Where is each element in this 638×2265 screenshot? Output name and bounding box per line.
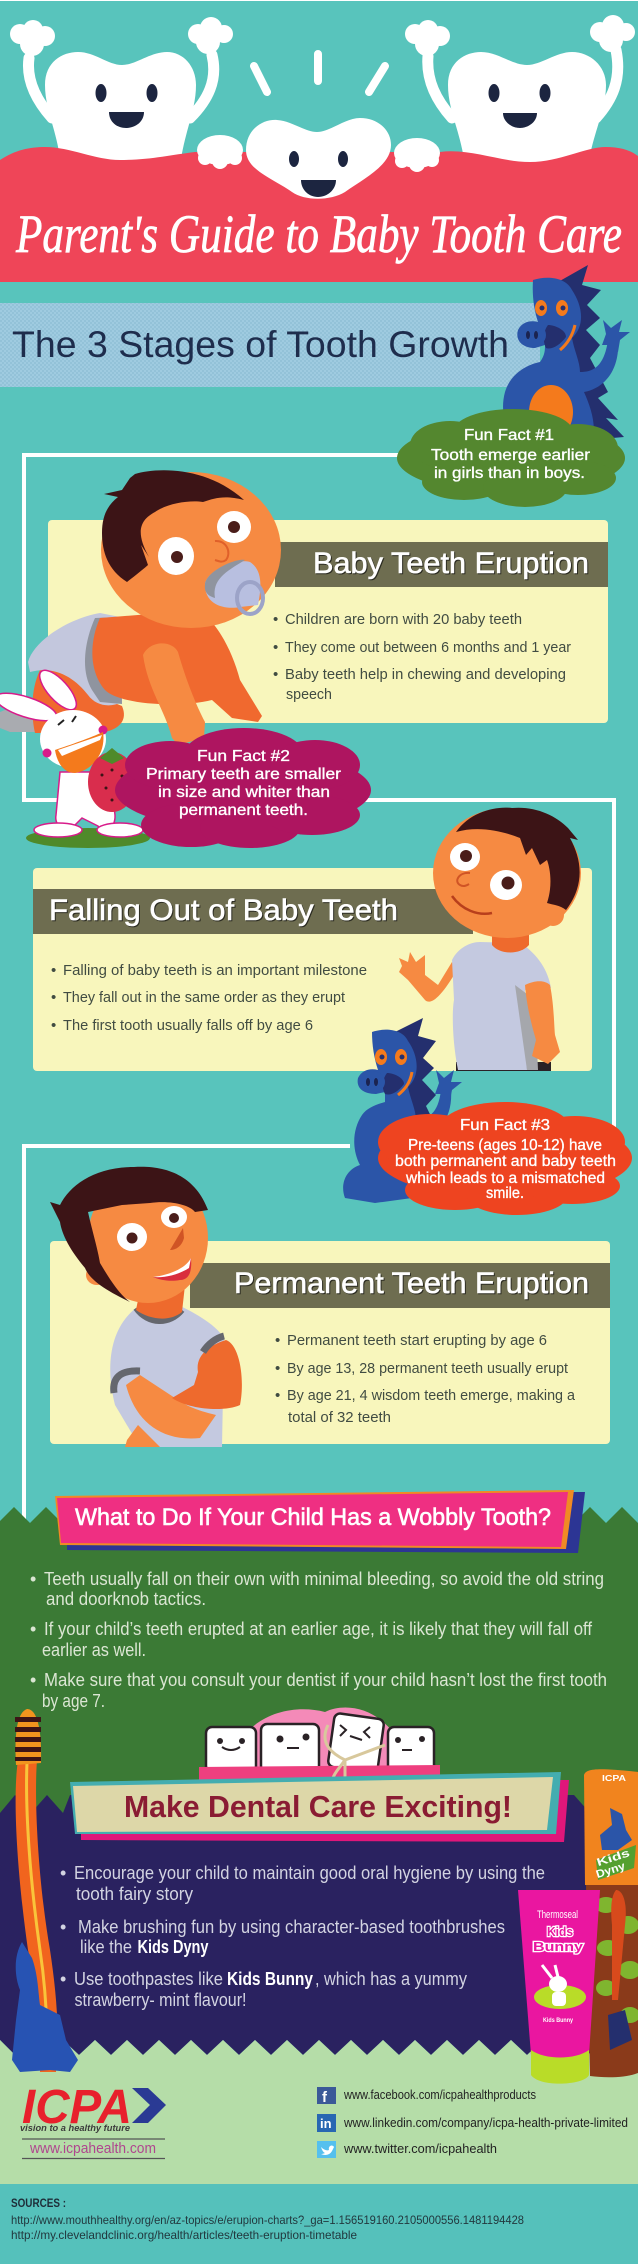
bullet list: • [51, 962, 56, 979]
callout: fun fact 1: Fun Fact #1 [464, 427, 554, 444]
bullet list: • [275, 1332, 280, 1349]
bullet list: • [51, 989, 56, 1006]
header illustration: happy teeth on gum [0, 15, 638, 282]
panel: sources: SOURCES : [11, 2196, 66, 2210]
text block: wobbly tooth advice [30, 1569, 607, 1711]
social links [317, 2087, 628, 2158]
icon: teeth with string [199, 1708, 440, 1780]
icon: boxed toothbrush Kids Dyny: ICPA [602, 1774, 626, 1783]
text block: wobbly tooth advice: • [30, 1569, 36, 1589]
bullet list: • [273, 666, 278, 683]
background: green section [0, 1507, 638, 1813]
gum [0, 147, 638, 282]
text block: wobbly tooth advice: Teeth usually fall on their own with minimal bleeding, so avoid the old string [44, 1569, 604, 1589]
callout: fun fact 3: Fun Fact #3 [460, 1117, 550, 1134]
bullet list: • [273, 639, 278, 656]
icon: facebook: f [322, 2089, 328, 2106]
bullet list: total of 32 teeth [288, 1409, 391, 1426]
heading: baby teeth eruption [275, 542, 608, 587]
text block: make dental care advice [60, 1863, 545, 2010]
bullet list: They come out between 6 months and 1 year [285, 639, 571, 656]
icon: Kids Bunny toothpaste tube: Thermoseal [537, 1909, 578, 1921]
stage frame connectors [24, 455, 614, 1520]
icon: twitter [317, 2141, 336, 2158]
icon: Kids Bunny toothpaste tube [518, 1890, 600, 2084]
text block: make dental care advice: • [60, 1917, 66, 1937]
text block: wobbly tooth advice: by age 7. [42, 1691, 105, 1711]
social links: www.twitter.com/icpahealth [343, 2141, 497, 2156]
bullet list: Falling of baby teeth is an important milestone [63, 962, 367, 979]
callout: fun fact 1: in girls than in boys. [434, 465, 585, 482]
bullet list [51, 962, 367, 1034]
banner: make dental care exciting: Make Dental Care Exciting! [124, 1789, 512, 1824]
text block: wobbly tooth advice: • [30, 1670, 36, 1690]
heading: permanent teeth: Permanent Teeth Eruption [234, 1267, 589, 1300]
logo: ICPA [20, 2081, 166, 2158]
icon: boy with crossed arms [50, 1167, 242, 1447]
text block: make dental care advice: strawberry- mint flavour! [74, 1990, 246, 2010]
panel: falling out of baby teeth [33, 868, 592, 1071]
bullet list: • [51, 1017, 56, 1034]
bullet list: Children are born with 20 baby teeth [285, 611, 522, 628]
social links: www.facebook.com/icpahealthproducts [343, 2087, 536, 2102]
icon: bunny with strawberry [0, 665, 150, 848]
background: navy section [0, 1790, 638, 2055]
callout: fun fact 3: smile. [486, 1185, 524, 1202]
callout: fun fact 3: Pre-teens (ages 10-12) have [408, 1137, 602, 1154]
heading: falling out: Falling Out of Baby Teeth [49, 894, 398, 927]
section heading band: the 3 stages: The 3 Stages of Tooth Growth [12, 324, 509, 365]
logo: ICPA: vision to a healthy future [20, 2123, 130, 2133]
icon: linkedin [317, 2114, 336, 2132]
panel: sources: http://www.mouthhealthy.org/en/az-topics/e/erupion-charts?_ga=1.156519160.2105000556.1481194428 [11, 2213, 524, 2227]
icon: linkedin: in [320, 2116, 332, 2131]
panel: sources [0, 2184, 638, 2264]
icon: right tooth [405, 15, 635, 165]
callout: fun fact 2: in size and whiter than [158, 784, 330, 801]
bullet list [273, 611, 571, 703]
text block: make dental care advice: Kids Dyny [138, 1937, 208, 1957]
banner: wobbly tooth heading [55, 1490, 585, 1553]
icon: boxed toothbrush Kids Dyny: Dyny [595, 1860, 628, 1881]
text block: make dental care advice: Kids Bunny [227, 1969, 313, 1989]
text block: make dental care advice: Encourage your child to maintain good oral hygiene by using the [74, 1863, 545, 1883]
banner: wobbly tooth heading: What to Do If Your Child Has a Wobbly Tooth? [75, 1504, 551, 1531]
heading: baby teeth eruption: Baby Teeth Eruption [313, 547, 589, 580]
callout: fun fact 1 [397, 409, 625, 507]
icon: dragon mascot middle [343, 1018, 462, 1203]
icon: left tooth [10, 17, 233, 165]
text block: make dental care advice: , which has a yummy [315, 1969, 467, 1989]
icon: toothbrush with dragon handle [12, 1709, 78, 2072]
icon: centre tooth [197, 118, 440, 199]
icon: sparkle rays [254, 54, 385, 92]
panel: permanent teeth eruption [50, 1241, 610, 1444]
callout: fun fact 2: Fun Fact #2 [197, 748, 290, 765]
text block: wobbly tooth advice: • [30, 1619, 36, 1639]
bullet list: The first tooth usually falls off by age 6 [63, 1017, 313, 1034]
bullet list: Baby teeth help in chewing and developing [285, 666, 566, 683]
panel: baby teeth eruption [48, 520, 608, 723]
bullet list: By age 13, 28 permanent teeth usually erupt [287, 1360, 569, 1377]
text block: wobbly tooth advice: and doorknob tactics. [46, 1589, 206, 1609]
bullet list: By age 21, 4 wisdom teeth emerge, making a [287, 1387, 576, 1404]
text block: make dental care advice: Use toothpastes like [74, 1969, 223, 1989]
bullet list: • [273, 611, 278, 628]
text block: make dental care advice: like the [80, 1937, 132, 1957]
bullet list: They fall out in the same order as they erupt [63, 989, 346, 1006]
callout: fun fact 2: Primary teeth are smaller [146, 766, 342, 783]
banner: make dental care exciting [70, 1772, 569, 1842]
icon: facebook [317, 2087, 336, 2106]
text block: make dental care advice: • [60, 1863, 66, 1883]
panel: sources: http://my.clevelandclinic.org/health/articles/teeth-eruption-timetable [11, 2228, 357, 2242]
icon: Kids Bunny toothpaste tube: Kids Bunny [543, 2018, 574, 2024]
icon: crawling baby [0, 470, 281, 745]
text block: wobbly tooth advice: earlier as well. [42, 1640, 146, 1660]
callout: fun fact 2 [115, 728, 371, 848]
callout: fun fact 3 [378, 1102, 632, 1215]
bullet list: Permanent teeth start erupting by age 6 [287, 1332, 547, 1349]
text block: wobbly tooth advice: If your child’s teeth erupted at an earlier age, it is likely that they will fall off [44, 1619, 593, 1639]
callout: fun fact 3: which leads to a mismatched [405, 1170, 605, 1187]
logo: ICPA: ICPA [22, 2081, 132, 2134]
icon: boxed toothbrush Kids Dyny: Kids [595, 1847, 631, 1869]
callout: fun fact 2: permanent teeth. [179, 802, 308, 819]
logo: ICPA: www.icpahealth.com [29, 2140, 156, 2157]
heading: falling out [33, 889, 473, 934]
text block: make dental care advice: tooth fairy story [76, 1884, 193, 1904]
icon: Kids Bunny toothpaste tube: Kids [547, 1924, 573, 1939]
callout: fun fact 1: Tooth emerge earlier [431, 447, 591, 464]
icon: Kids Bunny toothpaste tube: Bunny [533, 1939, 584, 1954]
bullet list: • [275, 1360, 280, 1377]
bullet list [275, 1332, 576, 1426]
background: footer light green [0, 2040, 638, 2185]
text block: wobbly tooth advice: Make sure that you consult your dentist if your child hasn’t lost the first tooth [44, 1670, 607, 1690]
bullet list: speech [286, 686, 332, 703]
callout: fun fact 3: both permanent and baby teeth [395, 1153, 616, 1170]
heading: permanent teeth [190, 1263, 610, 1308]
icon: waving boy [399, 808, 581, 1071]
section heading band: the 3 stages [0, 303, 540, 387]
bullet list: • [275, 1387, 280, 1404]
icon: boxed toothbrush Kids Dyny [584, 1769, 638, 2077]
icon: dragon mascot top [503, 265, 630, 445]
text block: make dental care advice: Make brushing fun by using character-based toothbrushes [78, 1917, 505, 1937]
text block: make dental care advice: • [60, 1969, 66, 1989]
